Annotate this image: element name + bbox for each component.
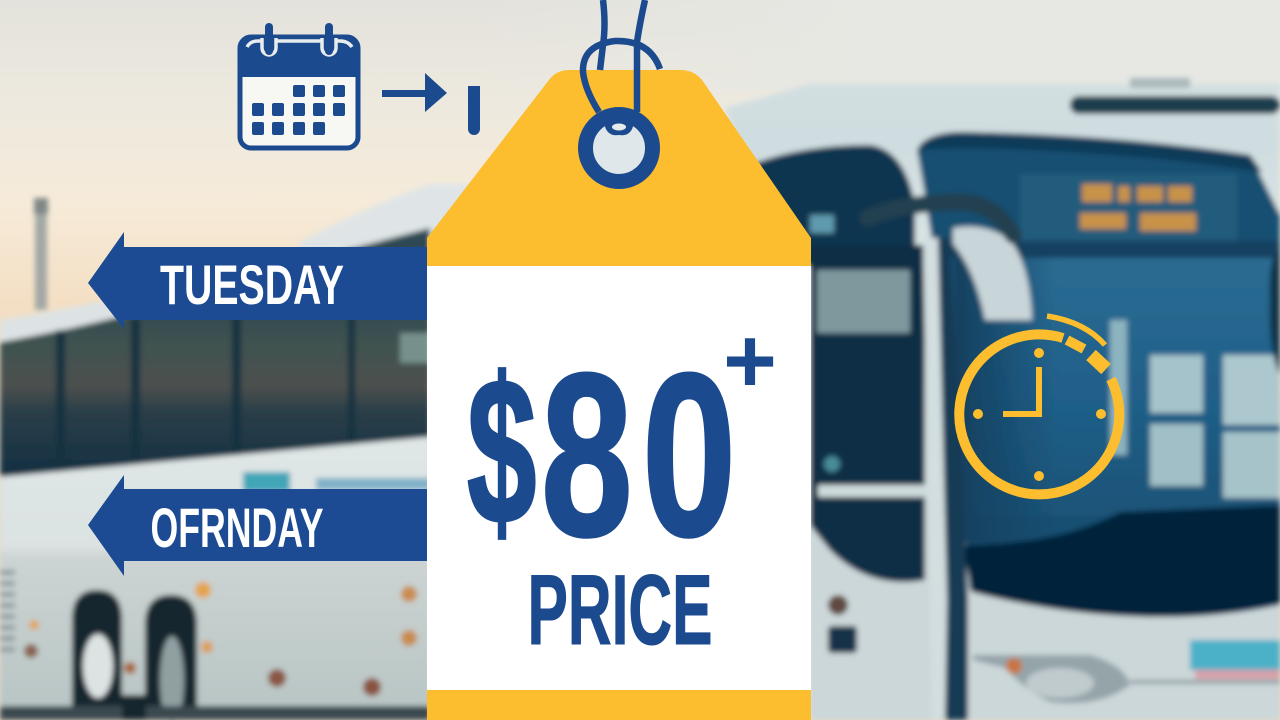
far roof and lamp post (35, 198, 47, 310)
pillar and mirror (923, 238, 958, 720)
price value: $ (467, 336, 536, 568)
destination sign (1080, 184, 1196, 231)
price value (467, 325, 736, 585)
right bus body (725, 84, 1280, 720)
icon: clock (959, 316, 1119, 494)
arrow label: Friday (88, 475, 430, 576)
tag hole (586, 114, 652, 182)
price value: 8 (541, 325, 633, 585)
arrow label: Tuesday (88, 232, 430, 329)
arrow label: Friday: OFRNDAY (150, 496, 324, 559)
tag string (583, 0, 660, 112)
price tag (427, 0, 811, 720)
left bus (0, 225, 430, 720)
door (750, 145, 915, 266)
price label: PRICE (528, 554, 712, 665)
headlight and plate (973, 655, 1130, 703)
icon: calendar (238, 23, 360, 148)
tag top: yellow (427, 70, 811, 266)
tag bottom stripe (427, 690, 811, 720)
arrow label: Tuesday: TUESDAY (160, 253, 344, 316)
windshield (917, 132, 1280, 617)
string knot (604, 122, 634, 135)
price value: 0 (642, 326, 736, 585)
tag body: white (427, 266, 811, 690)
arrow: calendar to marker (382, 73, 480, 135)
plus sign: + (723, 310, 777, 412)
